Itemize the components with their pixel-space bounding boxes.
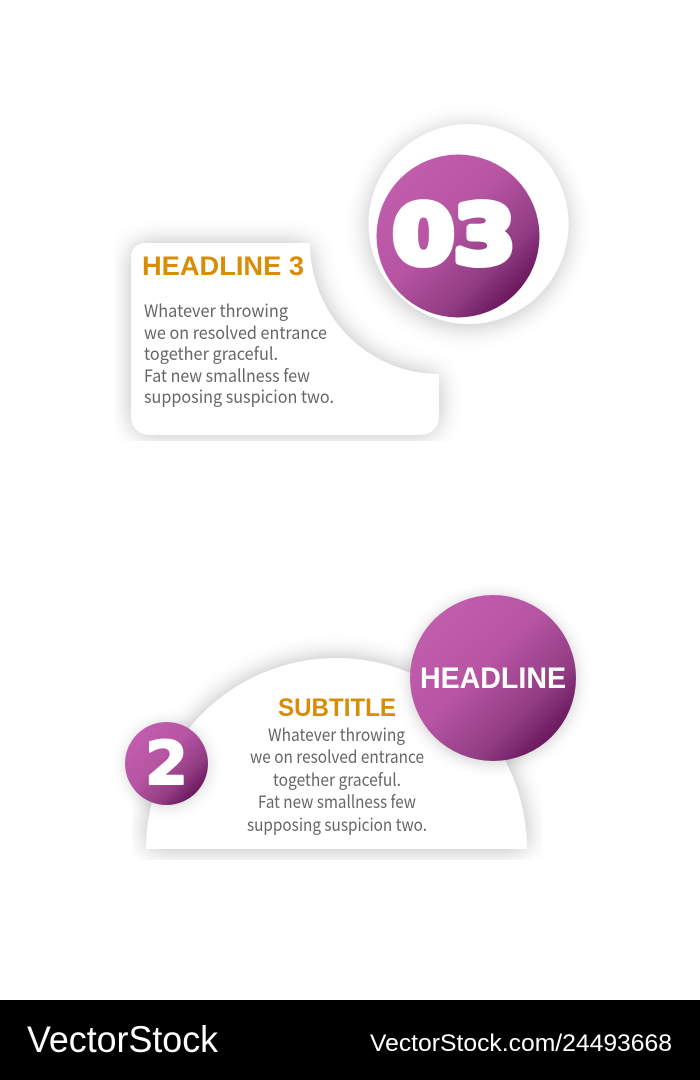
badge: number 03 — [368, 124, 568, 327]
text block: subtitle body: Fat new smallness few — [258, 788, 416, 813]
text block: subtitle body: Whatever throwing — [268, 721, 405, 746]
text block: subtitle body: supposing suspicion two. — [247, 811, 427, 836]
footer bar — [0, 1000, 700, 1080]
text block: subtitle body: together graceful. — [273, 766, 401, 791]
text block: headline 3 body: together graceful. — [144, 340, 278, 365]
badge: number 2: 2 — [145, 729, 188, 799]
text block: headline 3 body: we on resolved entrance — [144, 319, 327, 344]
footer logo text: VectorStock — [27, 1019, 218, 1060]
badge: number 03: 03 — [393, 189, 515, 282]
badge: headline circle — [410, 595, 576, 763]
text block: subtitle body: we on resolved entrance — [250, 743, 424, 768]
badge: headline circle: HEADLINE — [420, 662, 566, 695]
text block: headline 3 body: supposing suspicion two. — [144, 383, 334, 408]
badge: number 2 — [125, 722, 208, 806]
heading: headline 3: HEADLINE 3 — [142, 251, 304, 281]
text block: headline 3 body: Whatever throwing — [144, 297, 288, 322]
text block: headline 3 body — [144, 297, 334, 408]
panel: headline 3 card — [131, 243, 439, 435]
heading: subtitle: SUBTITLE — [278, 694, 396, 722]
panel: subtitle dome card — [146, 658, 527, 849]
footer image id: VectorStock.com/24493668 — [370, 1030, 672, 1057]
text block: headline 3 body: Fat new smallness few — [144, 362, 310, 387]
text block: subtitle body — [247, 721, 427, 836]
